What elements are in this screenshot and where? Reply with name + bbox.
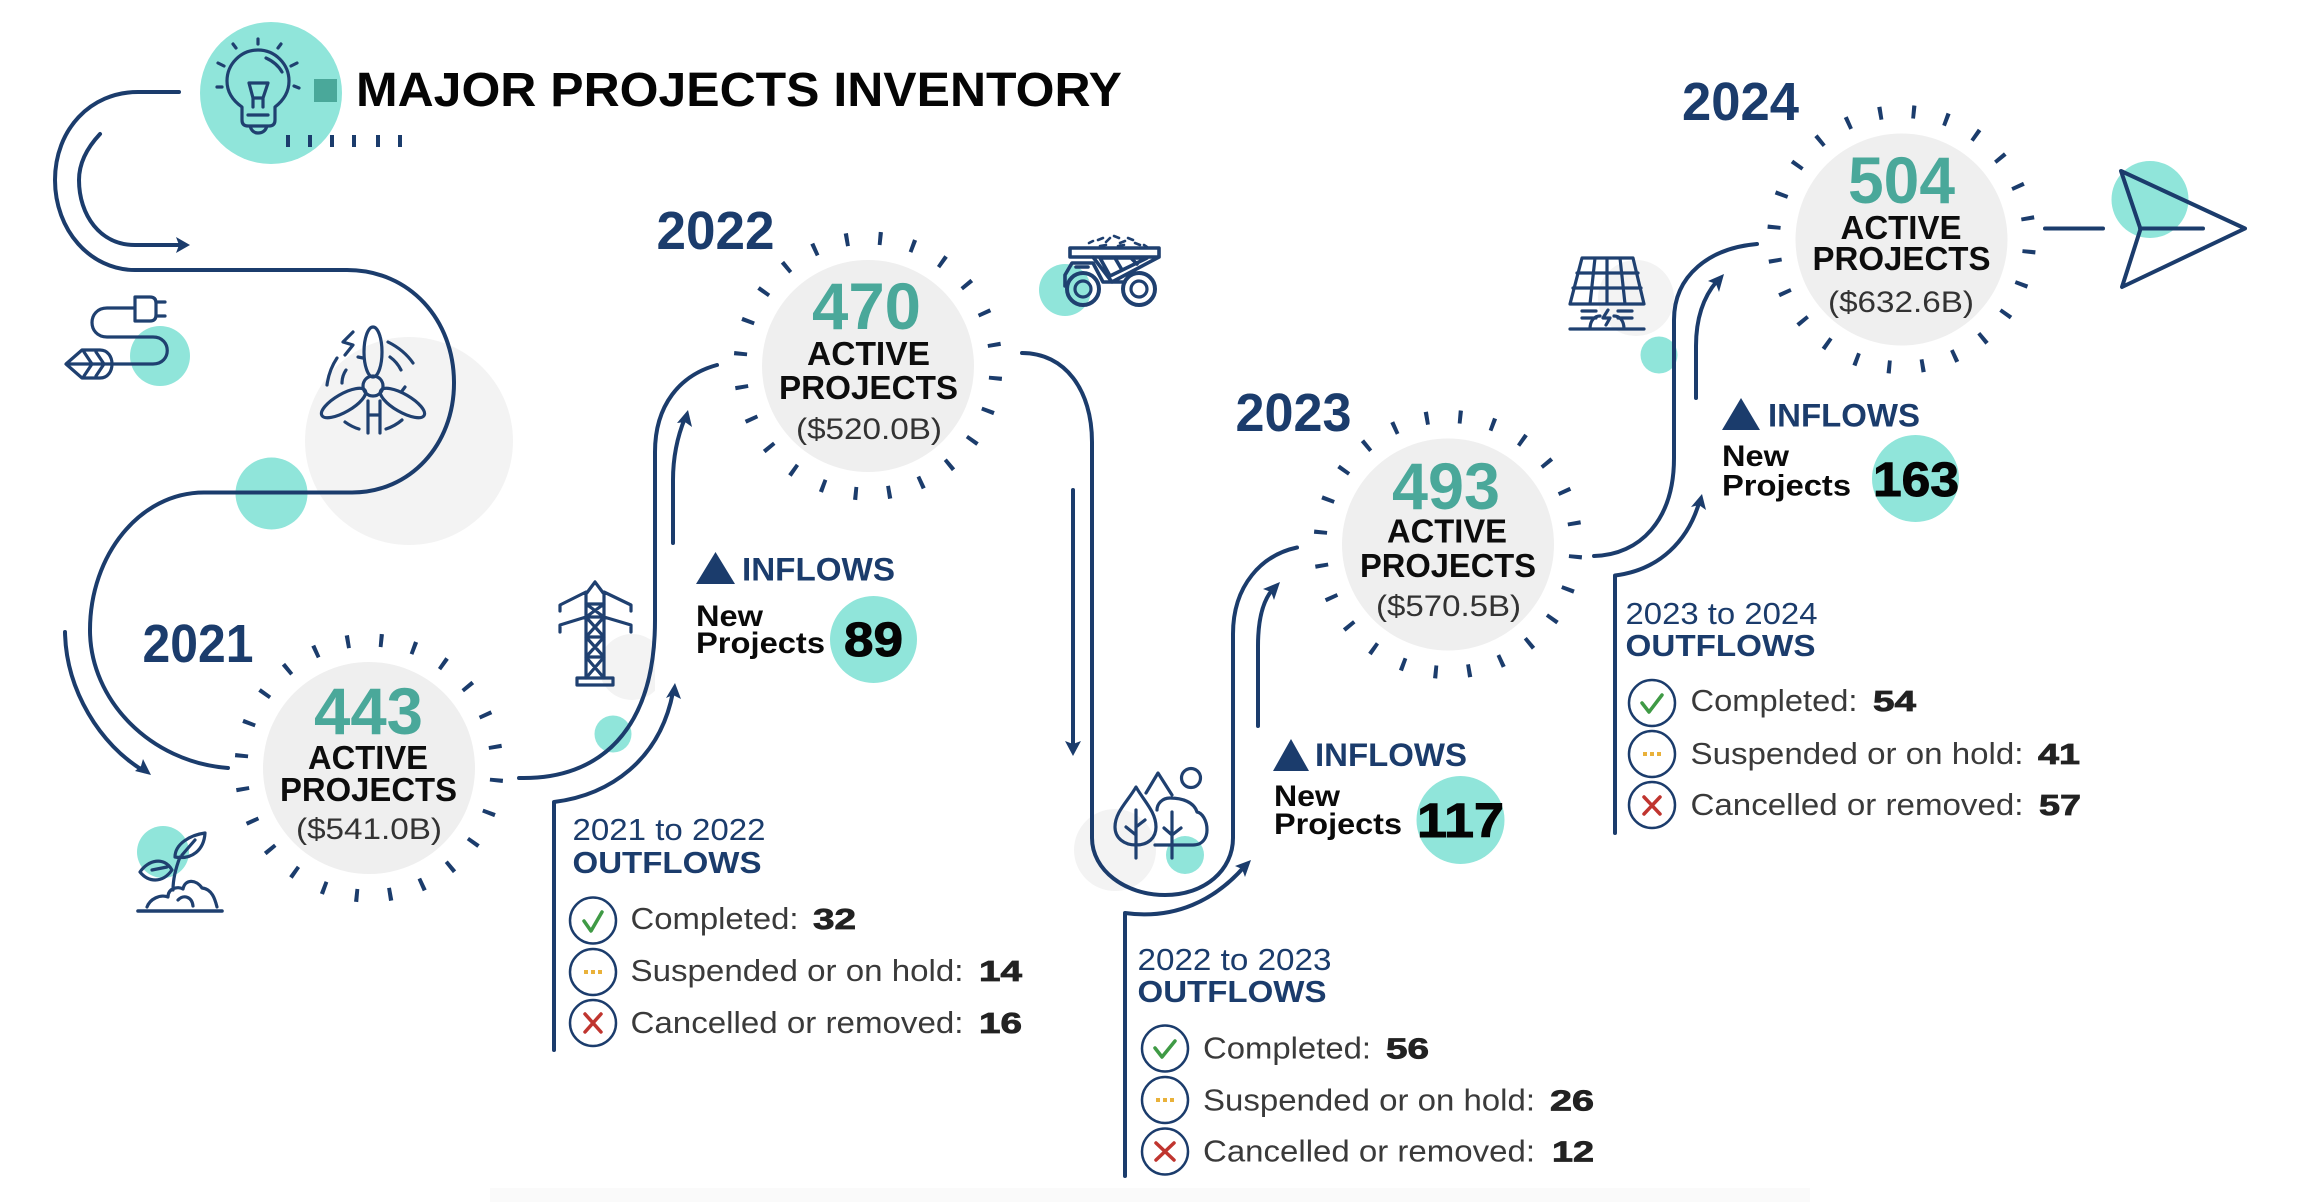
label: New xyxy=(696,600,764,633)
panel: 2023 xyxy=(1236,383,1576,672)
icon: transmission tower xyxy=(560,582,631,685)
active label: ACTIVE xyxy=(1840,209,1962,246)
cancelled: Cancelled or removed: xyxy=(1690,787,2024,822)
active label line 2: PROJECTS xyxy=(1360,547,1536,584)
title marker square xyxy=(314,79,337,102)
icon: wind turbine xyxy=(317,327,429,433)
heading: OUTFLOWS xyxy=(1626,628,1816,663)
number: 163 xyxy=(1873,454,1959,507)
connector: 2021 to 2022 xyxy=(519,365,717,778)
active count: 493 xyxy=(1392,449,1500,523)
title: MAJOR PROJECTS INVENTORY xyxy=(356,64,1122,117)
triangle xyxy=(696,552,735,584)
panel: 2022 outflows xyxy=(570,812,1022,1046)
node ticks xyxy=(1774,112,2030,368)
completed count: 56 xyxy=(1386,1034,1429,1066)
number: 117 xyxy=(1417,795,1504,848)
active count: 470 xyxy=(812,269,921,343)
value: ($570.5B) xyxy=(1376,590,1521,623)
period: 2023 to 2024 xyxy=(1626,596,1818,631)
completed: Completed: xyxy=(630,901,798,936)
active label line 2: PROJECTS xyxy=(280,771,457,808)
period: 2022 to 2023 xyxy=(1138,942,1332,977)
panel: 2022 inflows xyxy=(696,552,917,683)
accent: solar xyxy=(1640,336,1678,374)
arrow: inflow 2022 xyxy=(673,410,692,543)
circle: path accent xyxy=(236,458,308,530)
completed: Completed: xyxy=(1690,683,1858,718)
label: New xyxy=(1274,780,1341,813)
active label: ACTIVE xyxy=(807,335,930,372)
number badge xyxy=(830,596,917,683)
completed count: 32 xyxy=(813,904,856,936)
triangle xyxy=(1722,398,1760,430)
cancelled count: 16 xyxy=(979,1008,1022,1040)
node circle xyxy=(263,662,475,874)
value: ($632.6B) xyxy=(1828,286,1974,319)
icon backdrop: trees xyxy=(1074,809,1156,891)
node ticks xyxy=(1320,416,1576,672)
panel: 2024 outflows xyxy=(1626,596,2081,828)
node circle xyxy=(762,260,974,472)
suspended: Suspended or on hold: xyxy=(1203,1082,1535,1118)
completed: Completed: xyxy=(1203,1030,1371,1066)
icon: plug and leaf xyxy=(66,297,190,386)
year: 2021 xyxy=(142,614,254,674)
accent: tower xyxy=(594,716,632,752)
active count: 443 xyxy=(314,674,423,748)
heading: INFLOWS xyxy=(1768,398,1920,434)
connector: 2023 to 2024 xyxy=(1594,244,1757,556)
arrow: outflow 2024 xyxy=(1615,494,1706,833)
status icons xyxy=(1142,1026,1188,1174)
arrow: inflow 2024 xyxy=(1696,274,1724,398)
node circle xyxy=(1342,438,1554,650)
heading: INFLOWS xyxy=(742,552,895,588)
panel: 2022 xyxy=(656,201,996,494)
label line 2: Projects xyxy=(1722,470,1851,502)
heading: OUTFLOWS xyxy=(572,845,762,880)
cancelled: Cancelled or removed: xyxy=(1203,1134,1535,1168)
node ticks xyxy=(740,238,996,494)
arrow: down xyxy=(1065,490,1081,756)
completed count: 54 xyxy=(1873,686,1916,718)
number badge xyxy=(1416,776,1504,864)
icon: light bulb xyxy=(200,22,342,164)
icon: trees and mountain xyxy=(1115,768,1207,858)
node ticks xyxy=(241,640,497,896)
icon backdrop: tower xyxy=(599,634,655,700)
heading: INFLOWS xyxy=(1315,737,1467,773)
arrow: inner return xyxy=(79,134,190,253)
main path: start to 2021 xyxy=(55,92,454,768)
node circle xyxy=(1796,134,2008,346)
active label line 2: PROJECTS xyxy=(1812,240,1990,277)
label: New xyxy=(1722,440,1790,473)
number badge xyxy=(1872,435,1959,522)
title tick marks xyxy=(288,135,400,147)
panel: 2024 xyxy=(1682,72,2030,368)
active label: ACTIVE xyxy=(1387,512,1507,550)
value: ($520.0B) xyxy=(796,413,942,446)
circle: wind backdrop xyxy=(305,337,513,545)
icon: seedling xyxy=(137,826,222,911)
accent: trees xyxy=(1166,836,1204,874)
panel: 2024 inflows xyxy=(1722,398,1959,522)
heading: OUTFLOWS xyxy=(1138,974,1326,1009)
icon: paper plane xyxy=(2112,161,2245,287)
suspended: Suspended or on hold: xyxy=(1690,736,2024,771)
arrow: outflow 2023 xyxy=(1125,860,1251,1176)
panel: 2021 xyxy=(142,614,497,896)
cancelled count: 12 xyxy=(1552,1136,1594,1168)
status icons xyxy=(1629,680,1675,828)
icon backdrop: solar xyxy=(1598,260,1674,336)
year: 2024 xyxy=(1682,72,1799,132)
panel: 2023 outflows xyxy=(1138,942,1594,1174)
active count: 504 xyxy=(1848,143,1955,217)
active label: ACTIVE xyxy=(308,739,428,776)
path exit line xyxy=(2045,226,2103,230)
icon: solar panel xyxy=(1570,258,1644,329)
year: 2022 xyxy=(656,201,774,261)
arrow: outflow 2022 xyxy=(554,683,681,1050)
period: 2021 to 2022 xyxy=(572,812,766,847)
active label line 2: PROJECTS xyxy=(779,369,958,406)
value: ($541.0B) xyxy=(296,813,442,846)
icon: mining truck xyxy=(1039,236,1159,316)
status icons xyxy=(570,898,616,1046)
suspended count: 26 xyxy=(1550,1086,1594,1118)
connector: 2022 to 2023 xyxy=(1022,353,1297,895)
number: 89 xyxy=(844,614,903,667)
suspended count: 14 xyxy=(979,956,1022,988)
arrow: down to 2021 xyxy=(65,632,151,775)
suspended: Suspended or on hold: xyxy=(630,953,964,988)
label line 2: Projects xyxy=(696,627,825,660)
panel: 2023 inflows xyxy=(1273,737,1504,864)
triangle xyxy=(1273,739,1309,771)
year: 2023 xyxy=(1236,383,1352,443)
cancelled: Cancelled or removed: xyxy=(630,1005,964,1040)
suspended count: 41 xyxy=(2038,739,2080,771)
arrow: inflow 2023 xyxy=(1258,582,1280,726)
label line 2: Projects xyxy=(1274,808,1402,841)
cancelled count: 57 xyxy=(2039,790,2081,822)
